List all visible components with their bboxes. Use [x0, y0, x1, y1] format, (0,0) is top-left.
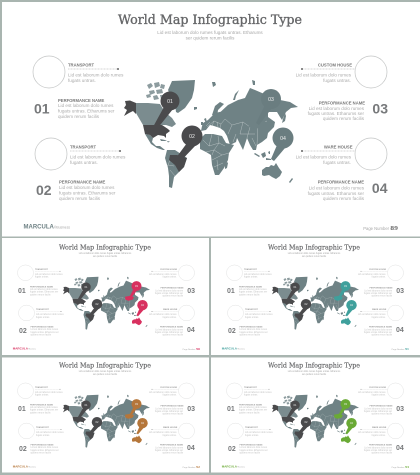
side blocks: fugats untras.	[163, 394, 177, 397]
world map with pink markers: 04	[141, 303, 145, 307]
title: World Map Infographic Type	[268, 361, 360, 369]
side blocks: Lid est laborum dolo rumes	[35, 391, 63, 394]
side blocks: quidem rerum facilis	[372, 295, 393, 297]
block: transport lower left: fugats untras.	[70, 160, 98, 165]
title: World Map Infographic Type	[59, 243, 151, 251]
side blocks: Lid est laborum dolo rumes	[155, 328, 184, 331]
subtitle: ser quidem rerum facilis	[93, 374, 118, 376]
block: performance 02: fugats untras. Etharums ser	[59, 190, 116, 196]
block: performance 02: Lid est laborum dolo rumes	[59, 185, 115, 190]
side blocks: fugats untras. Etharums ser	[155, 449, 183, 452]
world map with pink markers: 01	[85, 285, 88, 289]
block: performance 04: Lid est laborum dolo rumes	[309, 186, 365, 191]
numbers	[18, 406, 195, 453]
footer brand: MARCULA ®Business	[13, 465, 36, 469]
block: performance 03: Lid est laborum dolo rumes	[309, 106, 365, 111]
subtitle: Lid est laborum dolo rumes fugats untras. Etharums	[288, 370, 341, 373]
circle placeholder 02	[35, 138, 67, 170]
side blocks: Lid est laborum dolo rumes	[30, 446, 59, 449]
side blocks: fugats untras.	[35, 394, 49, 397]
side blocks: fugats untras.	[244, 276, 258, 279]
side blocks: fugats untras. Etharums ser	[364, 449, 392, 452]
side blocks: WARE HOUSE	[163, 426, 178, 429]
block: ware house: Lid est laborum dolo rumes	[296, 154, 352, 160]
numbers: 02	[228, 446, 236, 453]
side blocks	[226, 265, 404, 336]
side blocks: Lid est laborum dolo rumes	[245, 313, 273, 316]
world map with markers: 04	[280, 136, 286, 142]
world map with markers: 01	[167, 99, 173, 105]
block: performance 01: PERFORMANCE NAME	[58, 98, 105, 103]
block: performance 02	[36, 180, 116, 201]
block: ware house: fugats untras.	[323, 160, 351, 165]
circle placeholder 04	[355, 138, 387, 170]
numbers: 04	[187, 445, 195, 452]
side blocks: quidem rerum facilis	[30, 452, 52, 454]
side blocks: Lid est laborum dolo rumes	[364, 289, 393, 292]
title: World Map Infographic Type	[118, 13, 302, 28]
numbers: 04	[396, 327, 404, 334]
block: performance 04: 04	[372, 180, 388, 196]
side blocks: CUSTOM HOUSE	[369, 387, 387, 389]
block: performance 04: PERFORMANCE NAME	[318, 180, 364, 185]
block: ware house: WARE HOUSE	[324, 144, 353, 149]
block: transport top left	[68, 62, 124, 83]
block: custom house: CUSTOM HOUSE	[318, 62, 352, 68]
subtitle: Lid est laborum dolo rumes fugats untras. Etharums	[157, 30, 263, 35]
side blocks: Lid est laborum dolo rumes	[364, 446, 393, 449]
world map with pink markers	[63, 277, 150, 330]
side blocks: TRANSPORT	[35, 386, 49, 389]
world map with orange markers: 03	[135, 402, 139, 406]
circle placeholder 01	[33, 56, 65, 88]
block: performance 03: fugats untras. Etharums ser	[308, 111, 364, 116]
world map with teal markers: 04	[350, 303, 354, 307]
block: ware house	[296, 144, 355, 165]
side blocks: fugats untras. Etharums ser	[30, 409, 58, 412]
side blocks: fugats untras.	[372, 276, 386, 279]
page number: Page Number 92	[183, 465, 200, 469]
side blocks: fugats untras.	[245, 316, 259, 319]
side blocks: PERFORMANCE NAME	[30, 404, 54, 406]
side blocks: quidem rerum facilis	[239, 412, 260, 414]
world map with markers: 03	[268, 97, 274, 103]
side blocks: fugats untras. Etharums ser	[239, 409, 267, 412]
side blocks: Lid est laborum dolo rumes	[358, 273, 386, 276]
side blocks: quidem rerum facilis	[163, 413, 184, 415]
side blocks: PERFORMANCE NAME	[30, 286, 54, 288]
page number: Page Number 90	[183, 347, 200, 351]
block: performance 04: quidem rerum facilis	[323, 196, 365, 201]
side blocks: fugats untras.	[372, 316, 386, 319]
block: custom house: Lid est laborum dolo rumes	[296, 72, 352, 78]
footer brand: MARCULA ®Business	[13, 347, 36, 351]
side blocks: fugats untras.	[35, 276, 49, 279]
world map with teal markers: 01	[294, 285, 297, 289]
subtitle: ser quidem rerum facilis	[186, 36, 235, 41]
side blocks: TRANSPORT	[245, 308, 259, 311]
side blocks: Lid est laborum dolo rumes	[35, 273, 63, 276]
side blocks: Lid est laborum dolo rumes	[358, 313, 386, 316]
numbers: 02	[19, 446, 27, 453]
numbers: 03	[187, 406, 195, 413]
side blocks: PERFORMANCE NAME	[30, 443, 54, 446]
block: performance 02: 02	[36, 182, 52, 198]
subtitle: Lid est laborum dolo rumes fugats untras. Etharums	[79, 370, 132, 373]
side blocks: Lid est laborum dolo rumes	[240, 328, 268, 331]
side blocks: fugats untras. Etharums ser	[155, 410, 183, 413]
subtitle: ser quidem rerum facilis	[93, 256, 118, 258]
title: World Map Infographic Type	[268, 243, 360, 251]
side blocks: Lid est laborum dolo rumes	[30, 328, 59, 331]
side blocks: fugats untras. Etharums ser	[30, 291, 58, 294]
side blocks: quidem rerum facilis	[372, 453, 393, 454]
side blocks: Lid est laborum dolo rumes	[149, 391, 177, 394]
side blocks: fugats untras.	[163, 434, 177, 437]
side blocks: TRANSPORT	[36, 426, 50, 429]
side blocks: Lid est laborum dolo rumes	[149, 431, 177, 434]
side blocks: Lid est laborum dolo rumes	[36, 313, 64, 316]
side blocks: TRANSPORT	[36, 308, 50, 311]
world map with teal markers: 03	[344, 284, 348, 288]
page number: Page Number 89	[363, 226, 398, 232]
block: custom house	[296, 62, 355, 83]
side blocks: fugats untras. Etharums ser	[364, 292, 392, 295]
side blocks: Lid est laborum dolo rumes	[30, 406, 58, 409]
world map with orange markers	[63, 395, 150, 448]
world map with pink markers: 03	[135, 284, 139, 288]
side blocks: TRANSPORT	[35, 268, 49, 271]
block: transport top left: fugats untras.	[68, 78, 96, 83]
block: transport lower left: Lid est laborum dolo rumes	[70, 154, 126, 160]
side blocks: Lid est laborum dolo rumes	[155, 289, 184, 292]
subtitle: ser quidem rerum facilis	[302, 256, 327, 258]
numbers: 01	[18, 406, 26, 413]
footer brand: MARCULA ®Business	[222, 347, 245, 351]
numbers: 04	[187, 327, 195, 334]
numbers: 01	[18, 288, 26, 295]
side blocks: fugats untras. Etharums ser	[155, 331, 183, 334]
side blocks	[226, 383, 404, 454]
world map with orange markers: 02	[96, 420, 99, 424]
block: performance 04	[308, 180, 388, 201]
side blocks: PERFORMANCE NAME	[240, 325, 263, 328]
side blocks: PERFORMANCE NAME	[369, 325, 393, 328]
side blocks: fugats untras. Etharums ser	[364, 331, 392, 334]
side blocks: PERFORMANCE NAME	[239, 286, 263, 288]
side blocks: quidem rerum facilis	[30, 412, 51, 414]
side blocks: PERFORMANCE NAME	[160, 405, 184, 408]
world map with green markers: 02	[305, 420, 308, 424]
side blocks: CUSTOM HOUSE	[369, 269, 387, 271]
world map with green markers	[272, 395, 359, 448]
side blocks: PERFORMANCE NAME	[369, 405, 393, 408]
side blocks: quidem rerum facilis	[372, 413, 393, 415]
side blocks: fugats untras.	[372, 394, 386, 397]
block: performance 04: fugats untras. Etharums ser	[308, 191, 364, 196]
side blocks: PERFORMANCE NAME	[369, 287, 393, 290]
subtitle: ser quidem rerum facilis	[302, 374, 327, 376]
page number: Page Number 93	[392, 465, 409, 469]
world map with orange markers: 04	[141, 421, 145, 425]
side blocks: TRANSPORT	[244, 386, 258, 389]
side blocks: PERFORMANCE NAME	[160, 287, 184, 290]
side blocks: fugats untras. Etharums ser	[155, 292, 183, 295]
side blocks: PERFORMANCE NAME	[160, 325, 184, 328]
slide: teal variant	[211, 238, 420, 355]
side blocks: PERFORMANCE NAME	[369, 443, 393, 446]
side blocks: quidem rerum facilis	[163, 335, 184, 336]
side blocks: TRANSPORT	[245, 426, 259, 429]
world map with green markers: 01	[294, 403, 297, 407]
slide: main grey variant	[2, 2, 420, 236]
side blocks: quidem rerum facilis	[372, 335, 393, 336]
side blocks: fugats untras.	[244, 394, 258, 397]
side blocks: quidem rerum facilis	[30, 294, 51, 296]
block: performance 03: PERFORMANCE NAME	[319, 100, 365, 105]
subtitle: Lid est laborum dolo rumes fugats untras. Etharums	[288, 252, 341, 255]
numbers	[227, 288, 404, 335]
slide: green variant	[211, 357, 420, 473]
block: performance 03: quidem rerum facilis	[323, 116, 365, 121]
side blocks: fugats untras.	[36, 316, 50, 319]
block: performance 01: fugats untras. Etharums ser	[58, 109, 115, 114]
side blocks: quidem rerum facilis	[239, 294, 260, 296]
side blocks: PERFORMANCE NAME	[30, 325, 54, 328]
block: transport lower left: TRANSPORT	[70, 144, 96, 149]
side blocks: Lid est laborum dolo rumes	[364, 407, 393, 410]
numbers: 03	[187, 288, 195, 295]
world map with markers: 02	[189, 134, 195, 140]
block: performance 01	[34, 98, 115, 119]
side blocks: Lid est laborum dolo rumes	[358, 431, 386, 434]
side blocks: Lid est laborum dolo rumes	[30, 288, 58, 291]
block: transport top left: TRANSPORT	[68, 62, 94, 68]
block: performance 02: quidem rerum facilis	[59, 196, 101, 201]
numbers: 01	[227, 406, 235, 413]
side blocks: WARE HOUSE	[163, 308, 178, 311]
side blocks: fugats untras. Etharums ser	[364, 410, 392, 413]
subtitle: Lid est laborum dolo rumes fugats untras. Etharums	[79, 252, 132, 255]
side blocks: Lid est laborum dolo rumes	[155, 446, 184, 449]
side blocks: Lid est laborum dolo rumes	[244, 391, 272, 394]
side blocks: fugats untras. Etharums ser	[239, 291, 267, 294]
numbers: 03	[396, 406, 404, 413]
side blocks: CUSTOM HOUSE	[160, 269, 178, 271]
world map with orange markers: 01	[85, 403, 88, 407]
title: World Map Infographic Type	[59, 361, 151, 369]
side blocks: quidem rerum facilis	[30, 334, 52, 336]
side blocks: quidem rerum facilis	[240, 452, 261, 454]
side blocks: fugats untras. Etharums ser	[30, 331, 59, 334]
block: performance 01: 01	[34, 100, 50, 116]
world map with green markers: 04	[350, 421, 354, 425]
side blocks: PERFORMANCE NAME	[240, 443, 263, 446]
slide: orange variant	[2, 357, 209, 473]
side blocks: Lid est laborum dolo rumes	[245, 431, 273, 434]
numbers: 04	[396, 445, 404, 452]
side blocks: fugats untras.	[163, 276, 177, 279]
block: performance 03	[308, 100, 388, 121]
side blocks: quidem rerum facilis	[163, 453, 184, 454]
numbers: 03	[396, 288, 404, 295]
block: performance 01: Lid est laborum dolo rumes	[58, 103, 114, 108]
side blocks: Lid est laborum dolo rumes	[364, 328, 393, 331]
block: transport top left: Lid est laborum dolo rumes	[68, 72, 124, 78]
side blocks: Lid est laborum dolo rumes	[149, 273, 177, 276]
side blocks: Lid est laborum dolo rumes	[155, 407, 184, 410]
side blocks: PERFORMANCE NAME	[239, 404, 263, 406]
numbers: 01	[227, 288, 235, 295]
side blocks: Lid est laborum dolo rumes	[240, 446, 268, 449]
side blocks: fugats untras.	[36, 434, 50, 437]
side blocks: fugats untras. Etharums ser	[240, 331, 268, 334]
block: performance 01: quidem rerum facilis	[58, 114, 100, 119]
side blocks: CUSTOM HOUSE	[160, 387, 178, 389]
world map with markers	[124, 80, 298, 188]
side blocks: fugats untras.	[245, 434, 259, 437]
side blocks: fugats untras.	[372, 434, 386, 437]
footer brand: MARCULA ®Business	[222, 465, 245, 469]
numbers: 02	[228, 328, 236, 335]
footer brand: MARCULA®Business	[24, 225, 70, 231]
side blocks	[18, 383, 194, 454]
side blocks: Lid est laborum dolo rumes	[239, 288, 267, 291]
side blocks: Lid est laborum dolo rumes	[36, 431, 64, 434]
world map with pink markers: 02	[96, 302, 99, 306]
side blocks: Lid est laborum dolo rumes	[244, 273, 272, 276]
block: transport lower left	[70, 144, 126, 165]
block: performance 02: PERFORMANCE NAME	[59, 180, 106, 185]
side blocks: TRANSPORT	[244, 268, 258, 271]
side blocks: Lid est laborum dolo rumes	[358, 391, 386, 394]
side blocks	[18, 265, 194, 336]
world map with teal markers	[272, 277, 359, 330]
side blocks: WARE HOUSE	[372, 426, 387, 429]
page number: Page Number 91	[392, 347, 409, 351]
block: custom house: fugats untras.	[323, 78, 351, 83]
side blocks: fugats untras. Etharums ser	[240, 449, 268, 452]
circle placeholder 03	[355, 56, 387, 88]
world map with green markers: 03	[344, 402, 348, 406]
side blocks: WARE HOUSE	[372, 308, 387, 311]
side blocks: fugats untras. Etharums ser	[30, 449, 59, 452]
slide: pink variant	[2, 238, 209, 355]
numbers	[227, 406, 404, 453]
world map with teal markers: 02	[305, 302, 308, 306]
side blocks: quidem rerum facilis	[163, 295, 184, 297]
side blocks: PERFORMANCE NAME	[160, 443, 184, 446]
block: performance 03: 03	[372, 100, 388, 116]
side blocks: Lid est laborum dolo rumes	[149, 313, 177, 316]
numbers	[18, 288, 195, 335]
side blocks: Lid est laborum dolo rumes	[239, 406, 267, 409]
side blocks: fugats untras.	[163, 316, 177, 319]
numbers: 02	[19, 328, 27, 335]
side blocks: quidem rerum facilis	[240, 334, 261, 336]
